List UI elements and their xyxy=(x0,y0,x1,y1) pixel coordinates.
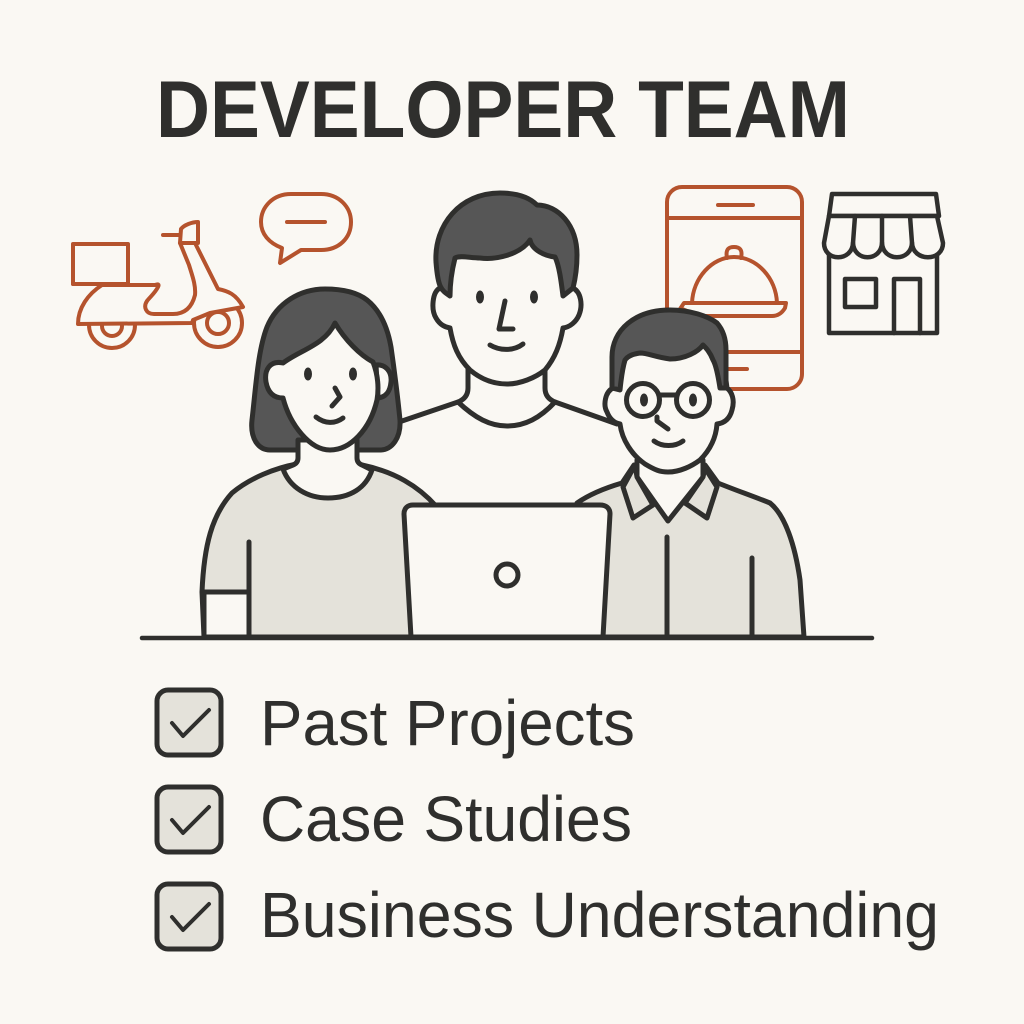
desk line xyxy=(142,636,872,640)
laptop xyxy=(404,505,610,637)
person: man with glasses on right xyxy=(577,310,804,637)
title: DEVELOPER TEAM xyxy=(156,65,850,155)
person: man in centre xyxy=(402,193,617,426)
icon: phone with food cloche xyxy=(667,187,802,389)
icon: speech bubble xyxy=(261,194,351,263)
icon: delivery scooter xyxy=(73,222,243,348)
checklist item: Past Projects: Past Projects xyxy=(260,687,635,759)
checklist item: Business Understanding: Business Understanding xyxy=(260,879,939,951)
checklist item: Case Studies: Case Studies xyxy=(260,783,632,855)
person: woman on left xyxy=(202,289,436,637)
icon: storefront xyxy=(824,194,943,333)
